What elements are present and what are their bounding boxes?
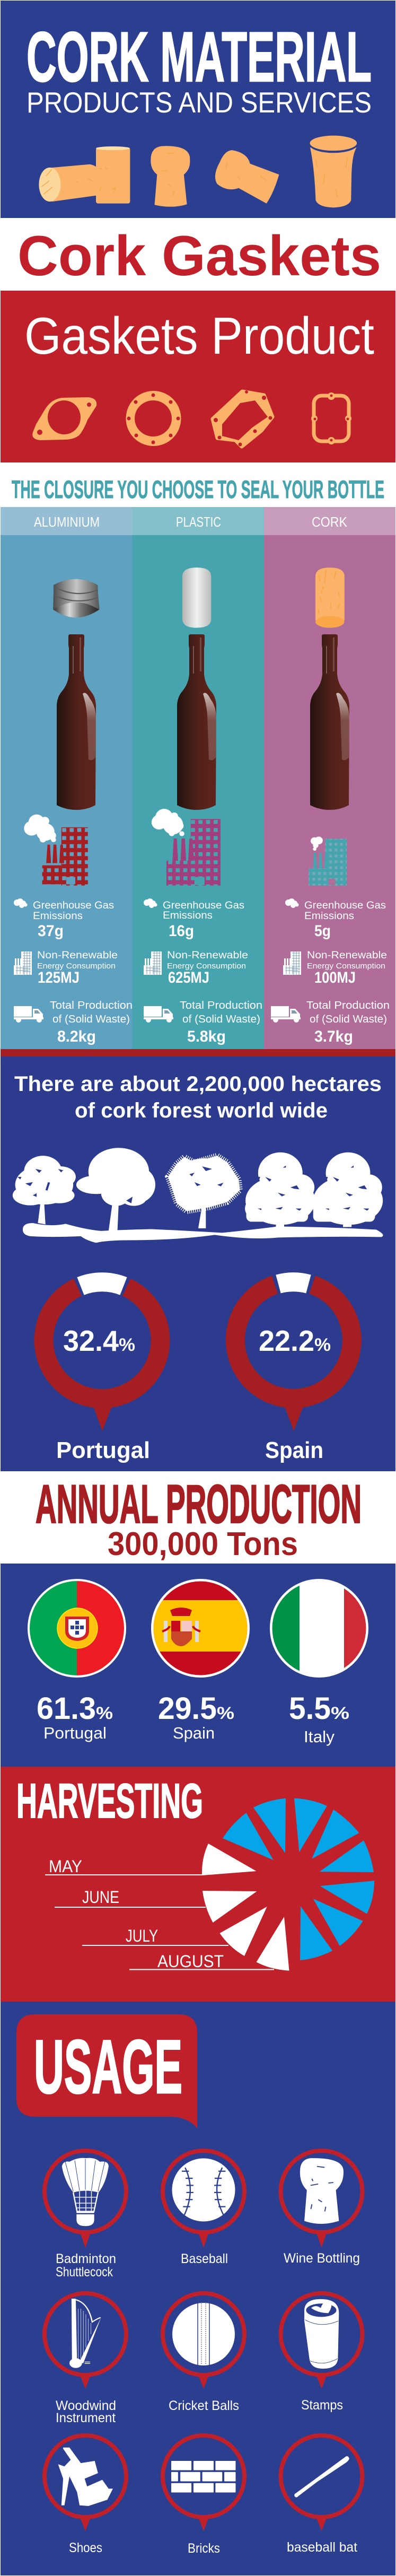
stat: greenhouse gas [285,898,386,940]
icon: gasket 4 [311,392,351,444]
icon: factory with emission cloud [24,815,88,886]
usage: baseball bat [281,2435,363,2555]
panel: usage [1,2002,395,2575]
chart: Portugal donut [43,1282,160,1431]
label: August: AUGUST [157,1952,224,1971]
label: Wine Bottling [284,2251,360,2266]
label: Cricket Balls [169,2398,239,2413]
usage: baseball [163,2151,244,2266]
stat: greenhouse gas: Greenhouse Gas [33,900,114,911]
icon: gasket 1 [32,397,96,440]
icon: bottle [177,634,216,810]
column header [1,507,133,535]
stat: solid waste: 5.8kg [187,1028,226,1045]
label: cork: CORK [312,514,348,530]
icon: factory with emission cloud [309,836,347,886]
stat: greenhouse gas: 37g [38,922,64,940]
heading: Cork Gaskets: Cork Gaskets [17,224,381,287]
icon: Spain flag [148,1578,254,1679]
label: Woodwind [56,2398,116,2413]
icon: corks [39,136,358,207]
stat: greenhouse gas: 16g [169,922,194,940]
stat: solid waste [271,1000,390,1045]
usage: shoes [45,2435,126,2555]
icon: Portugal flag [28,1579,126,1678]
subheading: 300,000 tons: 300,000 Tons [108,1526,298,1562]
icon: Italy flag [270,1578,371,1679]
label: Bricks [188,2541,220,2556]
usage: stamps [281,2293,363,2413]
stat: Italy: 5.5 [289,1691,331,1726]
icon: gasket 2 [126,391,181,446]
percent sign: % [314,1335,331,1355]
panel: cork column [264,507,395,1049]
heading: harvesting: HARVESTING [16,1774,203,1828]
panel: plastic column [133,507,264,1049]
usage: cricket balls [163,2293,244,2413]
stat: Italy [289,1691,349,1746]
usage: bricks [163,2435,244,2556]
stat: non-renewable energy: Energy Consumption [37,962,116,971]
label: Spain: Spain [265,1437,323,1463]
chart: Spain donut [235,1282,352,1431]
stat: solid waste: of (Solid Waste) [52,1014,130,1025]
usage: badminton shuttlecock [45,2151,126,2280]
icon: factory with emission cloud [152,809,221,886]
panel: producers [1,1564,395,1767]
illustration: cork trees [13,1148,383,1243]
stat: Portugal: % [96,1704,113,1723]
icon: gasket 3 [213,390,272,447]
panel: aluminium column [1,507,133,1049]
heading bubble: usage: USAGE [34,2025,182,2109]
stat: greenhouse gas: 5g [314,922,331,940]
value: 22.2 [259,1324,314,1357]
stat: non-renewable energy [144,950,248,986]
label: Shuttlecock [56,2265,113,2280]
label [56,2398,116,2425]
icon: aluminium cap [53,579,100,617]
stat: Portugal [37,1691,113,1742]
heading: hectares: of cork forest world wide [75,1099,328,1122]
stat: solid waste: 3.7kg [314,1028,353,1045]
stat: solid waste: of (Solid Waste) [310,1014,387,1025]
chart: harvest wheel [202,1798,374,1971]
usage: woodwind instrument [45,2293,126,2425]
stat: Spain [158,1691,234,1742]
stat: non-renewable energy [14,950,118,986]
value: 32.4 [63,1324,119,1357]
icon: plastic stopper [182,567,211,628]
stat: non-renewable energy: 100MJ [314,969,356,986]
stat: solid waste [14,1000,133,1045]
stat: greenhouse gas: Greenhouse Gas [163,900,244,911]
stat: Spain: % [217,1704,234,1723]
stat: greenhouse gas: Emissions [304,911,354,922]
panel: forest [1,1049,395,1471]
panel: harvesting [1,1767,395,2002]
stat: non-renewable energy [283,950,387,986]
label: Baseball [181,2251,228,2266]
stat: solid waste: Total Production [180,1000,262,1011]
stat: Italy: % [331,1704,349,1723]
label: aluminium: ALUMINIUM [34,514,100,530]
column header [264,507,395,535]
stat: non-renewable energy: Energy Consumption [167,962,246,971]
stat: greenhouse gas [144,898,244,940]
stat: greenhouse gas: Emissions [163,910,213,921]
label: July: JULY [126,1926,158,1945]
stat: solid waste [144,1000,262,1045]
stat: Portugal: 61.3 [37,1691,96,1726]
panel: gaskets product [1,291,395,462]
stat: non-renewable energy: Non-Renewable [307,950,387,961]
heading bubble: usage [16,2014,197,2128]
stat: greenhouse gas: Greenhouse Gas [304,900,386,911]
heading: hectares: There are about 2,200,000 hectares [14,1072,382,1096]
stat: solid waste: 8.2kg [57,1028,96,1045]
icon: bottle [310,634,349,810]
label: Badminton [56,2251,116,2266]
label: Shoes [69,2540,102,2555]
label: June: JUNE [82,1888,119,1907]
panel: top header [1,1,395,218]
label: Stamps [301,2398,343,2413]
stat: Italy: Italy [304,1727,335,1746]
usage: wine bottling [281,2151,363,2266]
stat: non-renewable energy: 625MJ [168,969,209,986]
label: plastic: PLASTIC [176,514,221,530]
stat: Spain: Spain [173,1724,215,1742]
label [56,2251,116,2280]
stat: non-renewable energy: Energy Consumption [307,962,385,971]
stat: non-renewable energy: Non-Renewable [37,950,118,961]
percent sign: % [119,1335,135,1355]
stat: solid waste: of (Solid Waste) [182,1014,260,1025]
icon: bottle [57,634,96,810]
icon: cork stopper [315,567,345,628]
stat: non-renewable energy: 125MJ [38,969,80,986]
stat: greenhouse gas [14,898,114,940]
label: May: MAY [49,1857,82,1876]
stat: greenhouse gas: Emissions [33,911,83,922]
stat: Portugal: Portugal [43,1724,107,1742]
stat: Spain: 29.5 [158,1691,217,1726]
stat: non-renewable energy: Non-Renewable [167,950,248,961]
column header [133,507,264,535]
stat: solid waste: Total Production [306,1000,390,1011]
label: Portugal: Portugal [56,1437,150,1463]
heading: hectares [14,1072,382,1122]
stat: solid waste: Total Production [50,1000,133,1011]
label: Instrument [56,2411,116,2425]
label: baseball bat [287,2540,357,2555]
